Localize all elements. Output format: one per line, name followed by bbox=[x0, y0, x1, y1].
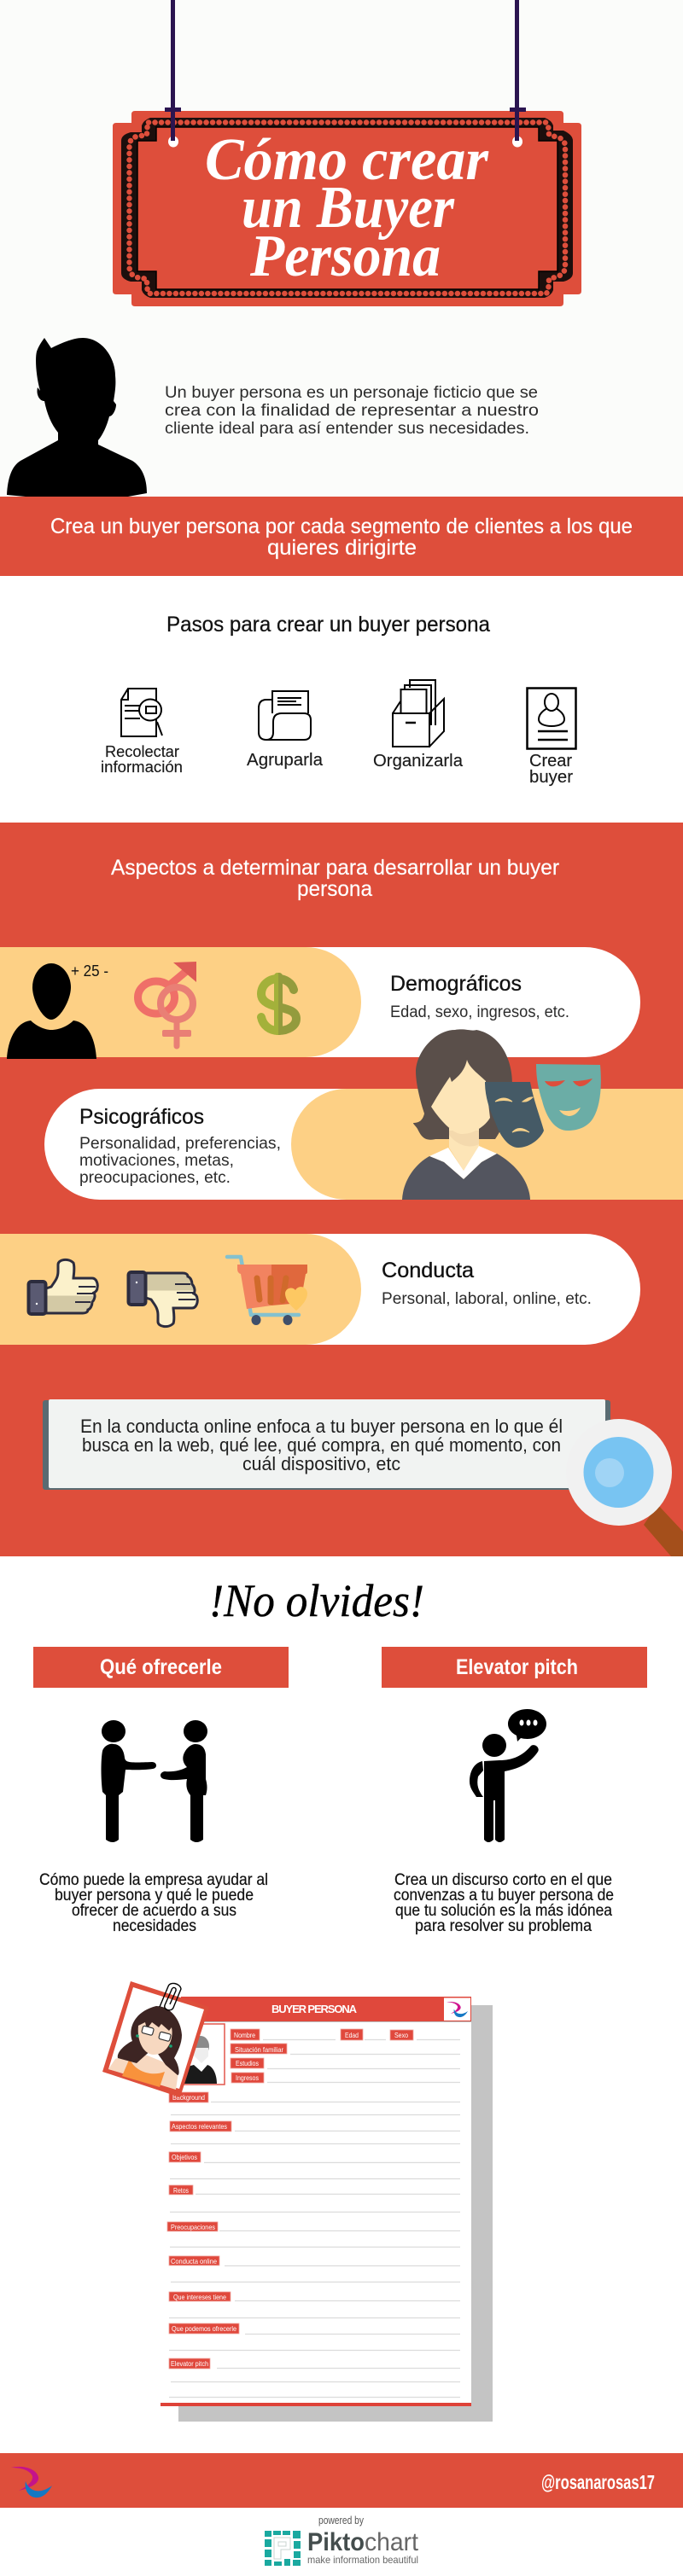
icon: person silhouette small bbox=[7, 963, 96, 1059]
icon: magnifying glass bbox=[566, 1419, 683, 1556]
girl earrings bbox=[136, 2034, 172, 2048]
heading: aspects: Aspectos a determinar para desarrollar un buyer bbox=[111, 856, 559, 880]
field: age bbox=[341, 2029, 363, 2040]
header: elevator pitch bbox=[382, 1647, 647, 1688]
piktochart wordmark: chart bbox=[365, 2528, 419, 2556]
text: behaviour detail: Personal, laboral, online, etc. bbox=[382, 1290, 592, 1308]
field: elevator pitch: Elevator pitch bbox=[171, 2359, 208, 2368]
field: age: Edad bbox=[345, 2031, 359, 2039]
text: what to offer: buyer persona y qué le puede bbox=[55, 1887, 254, 1904]
text: elevator pitch: que tu solución es la más idónea bbox=[395, 1902, 612, 1920]
piktochart wordmark bbox=[307, 2528, 419, 2556]
field: interests: Que intereses tiene bbox=[173, 2293, 226, 2301]
form header: BUYER PERSONA bbox=[271, 2003, 358, 2015]
field lines bbox=[169, 2039, 460, 2398]
icon: teal mask bbox=[536, 1064, 601, 1131]
avatar placeholder bbox=[171, 2024, 225, 2085]
paper clip bbox=[160, 1983, 181, 2010]
heading: behaviour: Conducta bbox=[382, 1259, 474, 1282]
age label: + 25 - bbox=[71, 962, 108, 980]
field: challenges: Retos bbox=[173, 2186, 189, 2195]
label: collect information bbox=[101, 742, 183, 776]
ornamental frame bbox=[121, 118, 573, 298]
icon: person speaking bbox=[470, 1709, 546, 1842]
ropes bbox=[165, 0, 526, 141]
title: Cómo crear bbox=[205, 127, 489, 193]
panel: intro background bbox=[0, 0, 683, 497]
icon: dark mask bbox=[485, 1082, 544, 1148]
footer logo bbox=[11, 2467, 52, 2497]
icon: thumb down bbox=[128, 1272, 197, 1327]
illustration: woman with masks bbox=[402, 1029, 601, 1200]
field: studies: Estudios bbox=[236, 2059, 259, 2067]
face bbox=[431, 1060, 490, 1134]
icon: box of files bbox=[393, 680, 444, 747]
text: what to offer: ofrecer de acuerdo a sus bbox=[72, 1902, 236, 1920]
panel: what to offer bbox=[33, 1647, 289, 1935]
intro text bbox=[165, 384, 539, 438]
field: sex: Sexo bbox=[394, 2031, 408, 2039]
hair bbox=[413, 1029, 512, 1140]
label: collect information: Recolectar bbox=[105, 742, 179, 760]
intro text: crea con la finalidad de representar a nuestro bbox=[165, 402, 539, 420]
label: organize: Organizarla bbox=[373, 751, 464, 770]
piktochart credit bbox=[265, 2514, 419, 2566]
icon: piktochart logo bbox=[265, 2531, 301, 2566]
text: elevator pitch: Crea un discurso corto en el que bbox=[394, 1871, 612, 1889]
icon: folder bbox=[259, 691, 311, 740]
panel: demographics row bbox=[0, 947, 640, 1059]
heading: aspects bbox=[111, 856, 559, 901]
form shadow bbox=[178, 2005, 493, 2422]
neck shadow bbox=[449, 1131, 479, 1147]
icon: two people shaking hands bbox=[101, 1720, 207, 1842]
tagline: make information beautiful bbox=[307, 2554, 418, 2566]
header: what to offer bbox=[33, 1647, 289, 1688]
callout text: cuál dispositivo, etc bbox=[242, 1453, 400, 1474]
label: group: Agruparla bbox=[247, 750, 324, 770]
callout: online behaviour bbox=[43, 1399, 610, 1490]
title: Persona bbox=[249, 224, 441, 289]
icon: shopping cart bbox=[227, 1257, 307, 1325]
field: income: Ingresos bbox=[236, 2073, 259, 2082]
jacket bbox=[402, 1154, 530, 1200]
sign plate bbox=[113, 111, 581, 306]
text: elevator pitch: convenzas a tu buyer persona de bbox=[394, 1887, 614, 1904]
field: sex bbox=[390, 2030, 413, 2040]
piktochart wordmark: Pikto bbox=[307, 2528, 365, 2556]
banner text: Crea un buyer persona por cada segmento de clientes a los que bbox=[50, 515, 633, 538]
label: collect information: información bbox=[101, 758, 183, 776]
girl body bbox=[108, 2055, 178, 2090]
girl face bbox=[138, 2022, 172, 2055]
hanging holes bbox=[168, 137, 522, 147]
form sheet bbox=[161, 1997, 471, 2406]
field: relevant aspects: Aspectos relevantes bbox=[172, 2122, 227, 2131]
text: demographics detail: Edad, sexo, ingresos, etc. bbox=[390, 1003, 569, 1021]
form header bbox=[181, 1997, 471, 2022]
title bbox=[205, 127, 489, 289]
text: what to offer: Cómo puede la empresa ayudar al bbox=[39, 1871, 268, 1889]
banner text bbox=[50, 515, 633, 560]
callout text bbox=[80, 1416, 563, 1474]
heading: do not forget: !No olvides! bbox=[209, 1575, 424, 1626]
field: family situation: Situación familiar bbox=[235, 2045, 283, 2054]
icon: gender symbols bbox=[138, 962, 196, 1046]
heading: steps: Pasos para crear un buyer persona bbox=[166, 613, 490, 637]
panel: behaviour row bbox=[0, 1234, 640, 1345]
label: create buyer: Crear bbox=[529, 751, 572, 770]
icon: person silhouette bbox=[7, 338, 147, 497]
title: un Buyer bbox=[242, 175, 455, 241]
header: what to offer: Qué ofrecerle bbox=[100, 1655, 222, 1679]
panel: aspects background bbox=[0, 823, 683, 1556]
heading: aspects: persona bbox=[297, 877, 372, 901]
text: psychographics detail: Personalidad, preferencias, bbox=[79, 1135, 281, 1153]
callout text: En la conducta online enfoca a tu buyer persona en lo que él bbox=[80, 1416, 563, 1437]
icon: document with magnifier bbox=[121, 689, 162, 736]
field: name: Nombre bbox=[234, 2031, 255, 2039]
collar bbox=[429, 1146, 497, 1179]
icon: thumb up bbox=[29, 1259, 97, 1314]
field: online behaviour: Conducta online bbox=[171, 2257, 217, 2265]
girl hair bbox=[118, 2006, 182, 2075]
panel: steps bbox=[101, 613, 575, 787]
text: psychographics detail bbox=[79, 1135, 281, 1187]
text: psychographics detail: motivaciones, metas, bbox=[79, 1152, 234, 1170]
text: what to offer bbox=[39, 1871, 268, 1935]
girl glasses bbox=[142, 2026, 171, 2042]
label: create buyer bbox=[529, 751, 573, 787]
form fields bbox=[167, 2029, 460, 2398]
field: studies bbox=[231, 2058, 264, 2068]
field: objectives: Objetivos bbox=[172, 2153, 197, 2161]
text: elevator pitch bbox=[394, 1871, 614, 1935]
text: psychographics detail: preocupaciones, etc. bbox=[79, 1169, 231, 1187]
intro text: Un buyer persona es un personaje ficticio que se bbox=[165, 384, 538, 402]
text: elevator pitch: para resolver su problema bbox=[415, 1917, 592, 1935]
field: worries: Preocupaciones bbox=[171, 2223, 215, 2231]
heading: psychographics: Psicográficos bbox=[79, 1105, 204, 1129]
banner text: quieres dirigirte bbox=[267, 536, 417, 560]
icon: dollar sign bbox=[261, 973, 296, 1035]
heading: demographics: Demográficos bbox=[390, 972, 522, 996]
photo frame bbox=[102, 1981, 209, 2097]
powered by: powered by bbox=[318, 2514, 364, 2527]
callout text: busca en la web, qué lee, qué compra, en qué momento, con bbox=[82, 1434, 561, 1456]
neck bbox=[449, 1128, 479, 1171]
clipped photo of persona bbox=[102, 1981, 209, 2097]
hanging sign bbox=[113, 0, 581, 306]
intro text: cliente ideal para así entender sus necesidades. bbox=[165, 420, 529, 438]
panel: buyer persona form bbox=[102, 1981, 493, 2422]
field: name bbox=[231, 2029, 260, 2040]
field: background: Background bbox=[172, 2093, 205, 2102]
panel: elevator pitch bbox=[382, 1647, 647, 1935]
label: create buyer: buyer bbox=[529, 767, 573, 787]
icon: profile card bbox=[528, 688, 575, 749]
text: what to offer: necesidades bbox=[113, 1917, 196, 1935]
panel: footer bbox=[0, 2453, 683, 2508]
panel: psychographics row bbox=[44, 1089, 683, 1200]
form logo bbox=[444, 1997, 471, 2021]
header: elevator pitch: Elevator pitch bbox=[456, 1655, 578, 1679]
field: what to offer: Que podemos ofrecerle bbox=[172, 2324, 236, 2333]
panel: segment banner bbox=[0, 497, 683, 576]
